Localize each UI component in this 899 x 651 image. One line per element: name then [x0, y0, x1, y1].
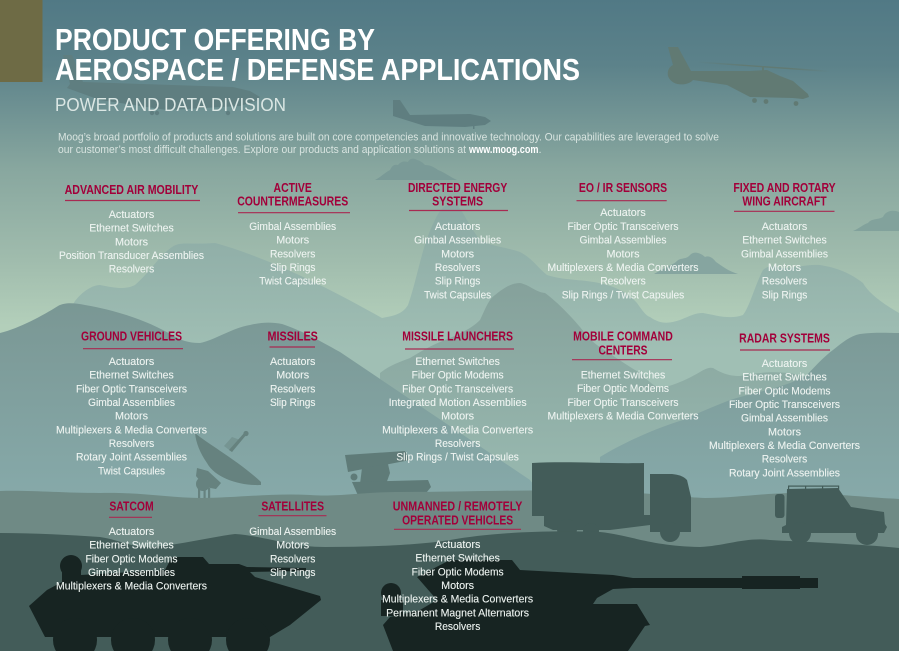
panel: missile launchers: Motors: [441, 411, 474, 423]
panel: satellites: Slip Rings: [270, 567, 316, 579]
panel: radar systems: Actuators: [762, 358, 808, 370]
panel: satcom: Gimbal Assemblies: [88, 567, 175, 579]
intro paragraph: Moog’s broad portfolio of products and solutions are built on core competencies and innovative technology. Our capabilities are leveraged to solve: [58, 132, 719, 144]
panel: directed energy systems: SYSTEMS: [432, 195, 483, 209]
icon: satellite dish: [195, 431, 261, 499]
panel: unmanned / remotely operated vehicles: OPERATED VEHICLES: [402, 513, 513, 527]
panel: missile launchers: Resolvers: [435, 438, 481, 450]
panel: unmanned / remotely operated vehicles: Permanent Magnet Alternators: [386, 607, 529, 619]
panel: unmanned / remotely operated vehicles: Actuators: [435, 539, 481, 551]
panel: eo / ir sensors: Fiber Optic Transceivers: [568, 221, 679, 233]
panel: active countermeasures: Gimbal Assemblies: [249, 221, 337, 233]
panel: satellites: SATELLITES: [261, 500, 324, 514]
panel: eo / ir sensors: Slip Rings / Twist Capsules: [562, 289, 685, 301]
panel: advanced air mobility: Position Transducer Assemblies: [59, 250, 204, 262]
panel: satcom: SATCOM: [109, 500, 154, 514]
panel: mobile command centers: Multiplexers & Media Converters: [548, 410, 699, 422]
panel: directed energy systems: Gimbal Assemblies: [414, 235, 501, 247]
panel: fixed and rotary wing aircraft: Motors: [768, 262, 801, 274]
panel: directed energy systems: Actuators: [435, 221, 481, 233]
panel: advanced air mobility: Actuators: [109, 209, 155, 221]
intro paragraph: www.moog.com: [468, 144, 539, 156]
panel: fixed and rotary wing aircraft: [733, 181, 836, 301]
panel: unmanned / remotely operated vehicles: Motors: [441, 580, 474, 592]
panel: unmanned / remotely operated vehicles: UNMANNED / REMOTELY: [393, 500, 523, 514]
panel: eo / ir sensors: Resolvers: [600, 276, 646, 288]
panel: missiles: Motors: [276, 370, 310, 382]
intro paragraph: .: [538, 144, 542, 156]
panel: fixed and rotary wing aircraft: FIXED AND ROTARY: [733, 181, 836, 195]
panel: mobile command centers: MOBILE COMMAND: [573, 330, 673, 344]
panel: satcom: Multiplexers & Media Converters: [56, 581, 207, 593]
icon: large transport plane: [63, 55, 260, 115]
panel: ground vehicles: [56, 330, 207, 477]
panel: unmanned / remotely operated vehicles: Multiplexers & Media Converters: [382, 594, 533, 606]
panel: mobile command centers: CENTERS: [598, 343, 648, 357]
panel: directed energy systems: DIRECTED ENERGY: [408, 181, 508, 195]
panel: radar systems: [709, 332, 860, 479]
panel: directed energy systems: Motors: [441, 248, 474, 260]
middle mountain peak: [380, 283, 899, 651]
olive corner block: [0, 0, 42, 82]
ground band: front: [0, 531, 899, 651]
panel: directed energy systems: Twist Capsules: [424, 289, 491, 301]
panel: ground vehicles: Multiplexers & Media Converters: [56, 424, 207, 436]
panel: fixed and rotary wing aircraft: WING AIRCRAFT: [742, 195, 827, 209]
panel: ground vehicles: Twist Capsules: [98, 465, 165, 477]
panel: radar systems: Ethernet Switches: [742, 372, 827, 384]
panel: mobile command centers: [548, 330, 699, 422]
panel: ground vehicles: Actuators: [109, 356, 155, 368]
panel: mobile command centers: Fiber Optic Transceivers: [568, 397, 679, 409]
panel: ground vehicles: Rotary Joint Assemblies: [76, 452, 187, 464]
ground band: middle: [0, 490, 899, 651]
panel: eo / ir sensors: Multiplexers & Media Converters: [548, 262, 699, 274]
panel: satcom: Fiber Optic Modems: [86, 553, 178, 565]
panel: fixed and rotary wing aircraft: Resolvers: [762, 276, 808, 288]
cloud: far right: [853, 211, 899, 231]
panel: radar systems: Rotary Joint Assemblies: [729, 467, 840, 479]
panel: unmanned / remotely operated vehicles: Resolvers: [435, 621, 481, 633]
cloud: center right: [654, 253, 738, 274]
panel: unmanned / remotely operated vehicles: [382, 500, 533, 633]
panel: missile launchers: Fiber Optic Transceivers: [402, 383, 513, 395]
panel: missiles: Actuators: [270, 356, 316, 368]
left dark mountain: [0, 303, 545, 651]
panel: fixed and rotary wing aircraft: Gimbal Assemblies: [741, 248, 828, 260]
icon: small plane: [393, 100, 491, 129]
panel: active countermeasures: Motors: [276, 235, 310, 247]
panel: fixed and rotary wing aircraft: Ethernet Switches: [742, 235, 827, 247]
panel: missile launchers: [382, 330, 533, 464]
panel: directed energy systems: [408, 181, 508, 301]
panel: ground vehicles: Ethernet Switches: [89, 370, 174, 382]
panel: mobile command centers: Ethernet Switches: [581, 370, 666, 382]
panel: eo / ir sensors: Actuators: [600, 207, 646, 219]
panel: radar systems: Fiber Optic Modems: [738, 385, 831, 397]
panel: ground vehicles: GROUND VEHICLES: [81, 330, 182, 344]
panel: missile launchers: Multiplexers & Media Converters: [382, 424, 533, 436]
panel: advanced air mobility: [59, 183, 204, 276]
panel: ground vehicles: Gimbal Assemblies: [88, 397, 175, 409]
panel: directed energy systems: Resolvers: [435, 262, 481, 274]
panel: unmanned / remotely operated vehicles: Fiber Optic Modems: [412, 566, 504, 578]
panel: eo / ir sensors: [548, 181, 699, 301]
icon: cargo truck: [532, 462, 691, 542]
panel: satcom: Ethernet Switches: [89, 540, 174, 552]
panel: directed energy systems: Slip Rings: [435, 276, 481, 288]
subtitle: POWER AND DATA DIVISION: [55, 94, 286, 115]
panel: missile launchers: Ethernet Switches: [415, 356, 500, 368]
panel: missile launchers: Slip Rings / Twist Capsules: [396, 452, 519, 464]
panel: satellites: [249, 500, 337, 579]
panel: missile launchers: Integrated Motion Assemblies: [389, 397, 527, 409]
icon: armored personnel carrier: [29, 555, 321, 651]
icon: helicopter: [668, 47, 830, 106]
panel: eo / ir sensors: EO / IR SENSORS: [579, 181, 667, 195]
far mountain range: [0, 203, 899, 651]
icon: utility jeep: [775, 486, 887, 545]
panel: unmanned / remotely operated vehicles: Ethernet Switches: [415, 553, 500, 565]
panel: satellites: Motors: [276, 540, 310, 552]
panel: missiles: Slip Rings: [270, 397, 316, 409]
cloud: center left: [375, 159, 457, 180]
panel: missiles: Resolvers: [270, 383, 316, 395]
panel: satellites: Gimbal Assemblies: [249, 526, 337, 538]
panel: missiles: MISSILES: [268, 330, 318, 344]
panel: radar systems: Gimbal Assemblies: [741, 413, 828, 425]
panel: ground vehicles: Motors: [115, 411, 148, 423]
intro paragraph: our customer’s most difficult challenges. Explore our products and application solutions at: [58, 144, 466, 156]
panel: advanced air mobility: ADVANCED AIR MOBILITY: [65, 183, 199, 197]
panel: missile launchers: MISSILE LAUNCHERS: [402, 330, 513, 344]
panel: active countermeasures: [237, 181, 350, 288]
panel: advanced air mobility: Resolvers: [109, 264, 155, 276]
panel: advanced air mobility: Ethernet Switches: [89, 223, 174, 235]
title: [55, 22, 580, 87]
panel: eo / ir sensors: Motors: [606, 248, 640, 260]
panel: fixed and rotary wing aircraft: Actuators: [762, 221, 808, 233]
panel: radar systems: Motors: [768, 426, 801, 438]
panel: satellites: Resolvers: [270, 553, 316, 565]
panel: radar systems: Fiber Optic Transceivers: [729, 399, 840, 411]
title: AEROSPACE / DEFENSE APPLICATIONS: [55, 52, 580, 87]
panel: ground vehicles: Resolvers: [109, 438, 155, 450]
panel: ground vehicles: Fiber Optic Transceivers: [76, 383, 187, 395]
panel: fixed and rotary wing aircraft: Slip Rings: [762, 289, 808, 301]
panel: satcom: Actuators: [109, 526, 155, 538]
panel: radar systems: RADAR SYSTEMS: [739, 332, 830, 346]
panel: active countermeasures: Twist Capsules: [259, 276, 327, 288]
panel: active countermeasures: COUNTERMEASURES: [237, 195, 348, 209]
panel: active countermeasures: ACTIVE: [274, 181, 312, 195]
panel: satcom: [56, 500, 207, 593]
right dark mountain: [600, 333, 899, 651]
title: PRODUCT OFFERING BY: [55, 22, 375, 57]
panel: advanced air mobility: Motors: [115, 236, 148, 248]
icon: missile launcher vehicle: [345, 451, 431, 500]
panel: eo / ir sensors: Gimbal Assemblies: [580, 235, 667, 247]
panel: radar systems: Multiplexers & Media Converters: [709, 440, 860, 452]
panel: radar systems: Resolvers: [762, 454, 808, 466]
panel: missile launchers: Fiber Optic Modems: [412, 370, 504, 382]
panel: missiles: [268, 330, 318, 409]
panel: mobile command centers: Fiber Optic Modems: [577, 383, 669, 395]
panel: active countermeasures: Resolvers: [270, 248, 316, 260]
icon: battle tank: [381, 560, 818, 651]
panel: active countermeasures: Slip Rings: [270, 262, 316, 274]
intro paragraph: [58, 132, 719, 156]
